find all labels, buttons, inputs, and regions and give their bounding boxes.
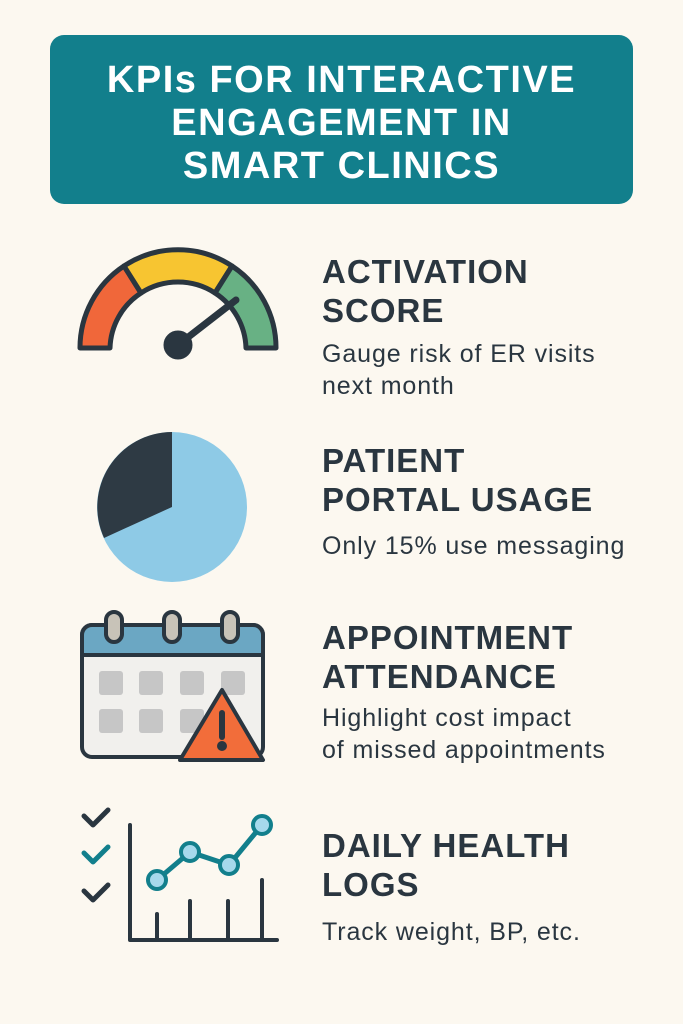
- text: activation score: next month: [322, 372, 455, 400]
- title: SMART CLINICS: [183, 145, 500, 187]
- text: appointment attendance: of missed appointments: [322, 736, 606, 764]
- title: KPIs FOR INTERACTIVE: [107, 59, 576, 101]
- text: appointment attendance: APPOINTMENT: [322, 619, 573, 656]
- text: activation score: SCORE: [322, 292, 444, 329]
- text: daily health logs: [322, 827, 581, 946]
- text: patient portal usage: PATIENT: [322, 442, 465, 479]
- text: patient portal usage: PORTAL USAGE: [322, 481, 593, 518]
- text: activation score: [322, 253, 596, 400]
- text: appointment attendance: ATTENDANCE: [322, 658, 557, 695]
- text: daily health logs: LOGS: [322, 866, 420, 903]
- title: [50, 35, 633, 204]
- icon: pie chart: [97, 432, 247, 582]
- text: patient portal usage: Only 15% use messaging: [322, 532, 625, 560]
- text: patient portal usage: [322, 442, 625, 560]
- text: activation score: ACTIVATION: [322, 253, 529, 290]
- title: ENGAGEMENT IN: [171, 102, 512, 144]
- text: activation score: Gauge risk of ER visits: [322, 340, 596, 368]
- icon: gauge: [80, 250, 276, 357]
- icon: calendar warning: [82, 612, 263, 760]
- text: appointment attendance: Highlight cost impact: [322, 704, 572, 732]
- icon: health log chart: [84, 810, 277, 940]
- text: appointment attendance: [322, 619, 606, 764]
- text: daily health logs: Track weight, BP, etc.: [322, 918, 581, 946]
- text: daily health logs: DAILY HEALTH: [322, 827, 570, 864]
